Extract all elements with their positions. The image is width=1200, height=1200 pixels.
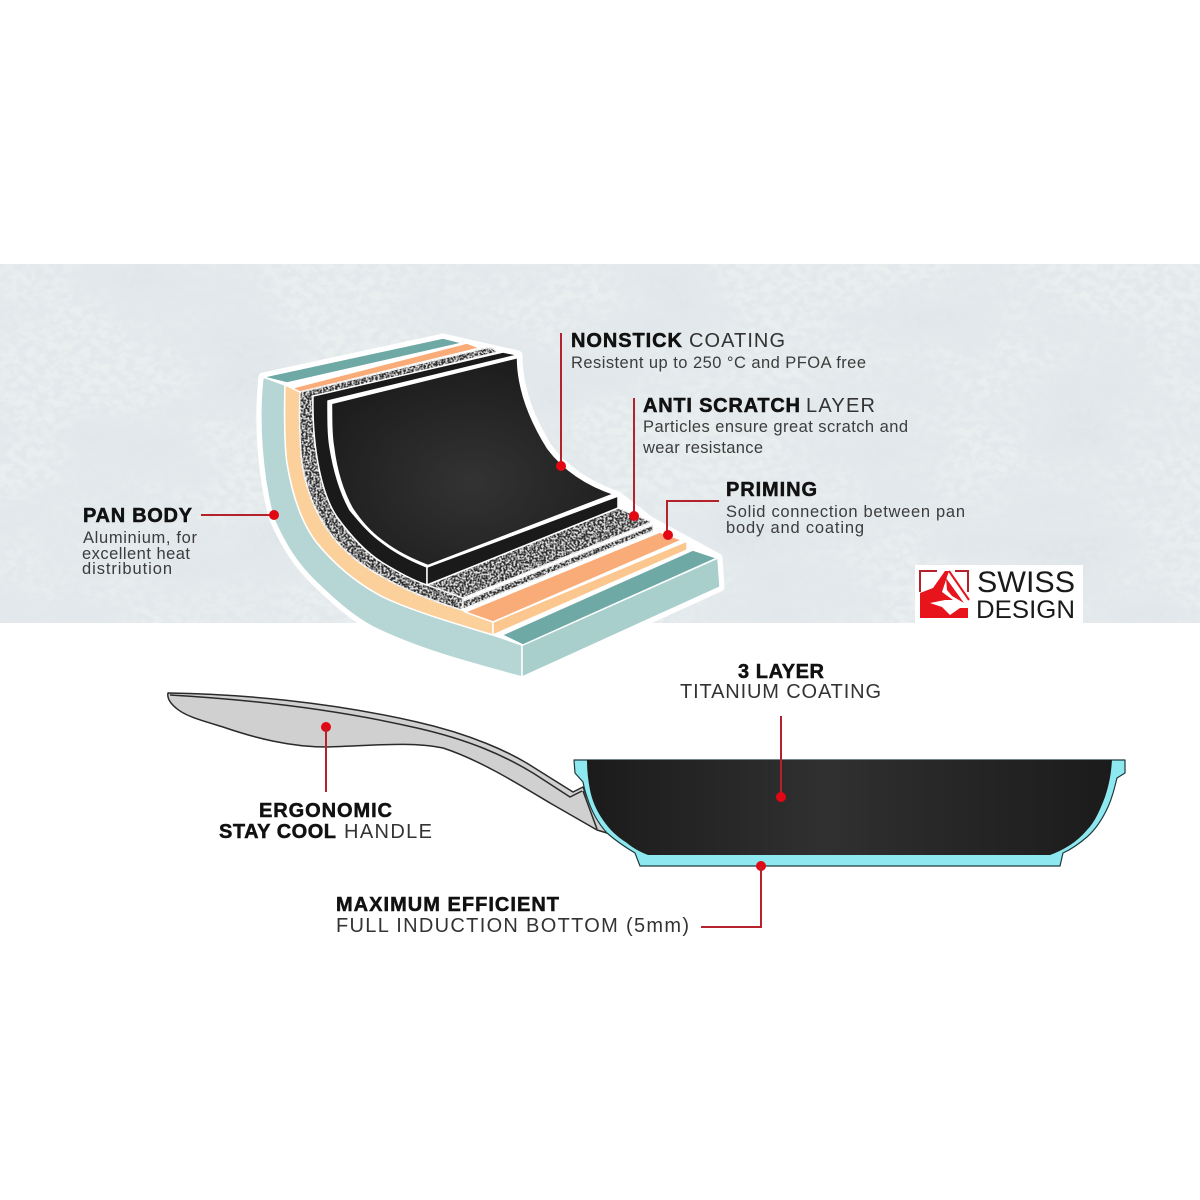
layer: priming right face xyxy=(493,541,687,635)
label: 3 layer titanium coating xyxy=(680,661,881,802)
label: anti scratch layer: LAYER xyxy=(806,395,875,417)
layer: anti scratch granules xyxy=(300,347,653,610)
icon: swiss design logo xyxy=(920,571,969,618)
pan body profile xyxy=(574,760,1125,866)
label: nonstick coating: NONSTICK xyxy=(571,330,683,352)
label: anti scratch layer xyxy=(629,395,908,521)
label: full induction bottom: MAXIMUM EFFICIENT xyxy=(336,894,559,916)
layered pan cross-section illustration xyxy=(261,338,720,677)
label: pan body: PAN BODY xyxy=(83,505,193,527)
label: nonstick coating: COATING xyxy=(689,330,785,352)
label: nonstick coating xyxy=(556,330,866,471)
swiss design badge xyxy=(915,565,1083,624)
label: priming: PRIMING xyxy=(726,479,817,501)
label: priming xyxy=(663,479,965,540)
label: priming: Solid connection between pan xyxy=(726,503,965,521)
label: nonstick coating: Resistent up to 250 °C and PFOA free xyxy=(571,354,866,372)
nonstick pan interior xyxy=(587,760,1112,855)
white halo xyxy=(261,338,720,677)
label: ergonomic handle: ERGONOMIC xyxy=(259,800,392,822)
label: 3 layer titanium coating: 3 LAYER xyxy=(738,661,825,683)
label: full induction bottom: FULL INDUCTION BOTTOM (5mm) xyxy=(336,915,689,937)
layer: aluminium body right face xyxy=(522,558,720,677)
label: priming: body and coating xyxy=(726,519,864,537)
label: anti scratch layer: ANTI SCRATCH xyxy=(643,395,800,417)
swiss design badge: DESIGN xyxy=(976,596,1075,624)
label: ergonomic handle: HANDLE xyxy=(344,821,432,843)
layer: priming front xyxy=(285,385,493,635)
label: ergonomic handle: STAY COOL xyxy=(219,821,336,843)
layer: nonstick side strips xyxy=(313,352,618,585)
label: pan body: distribution xyxy=(82,560,172,578)
layer: priming top faces xyxy=(292,343,682,622)
pan handle xyxy=(168,693,607,833)
label: 3 layer titanium coating: TITANIUM COATING xyxy=(680,681,881,703)
swiss design badge: SWISS xyxy=(977,566,1075,599)
layer: nonstick main surface xyxy=(331,357,615,566)
textured background band xyxy=(0,264,1200,623)
label: anti scratch layer: wear resistance xyxy=(642,439,763,457)
label: ergonomic handle xyxy=(219,722,432,843)
label: pan body xyxy=(82,505,279,578)
label: pan body: excellent heat xyxy=(82,545,190,563)
label: pan body: Aluminium, for xyxy=(83,529,198,547)
label: full induction bottom xyxy=(336,861,766,937)
layer: aluminium body front xyxy=(261,377,522,677)
layer: aluminium body top faces xyxy=(263,338,717,645)
label: anti scratch layer: Particles ensure great scratch and xyxy=(643,418,908,436)
